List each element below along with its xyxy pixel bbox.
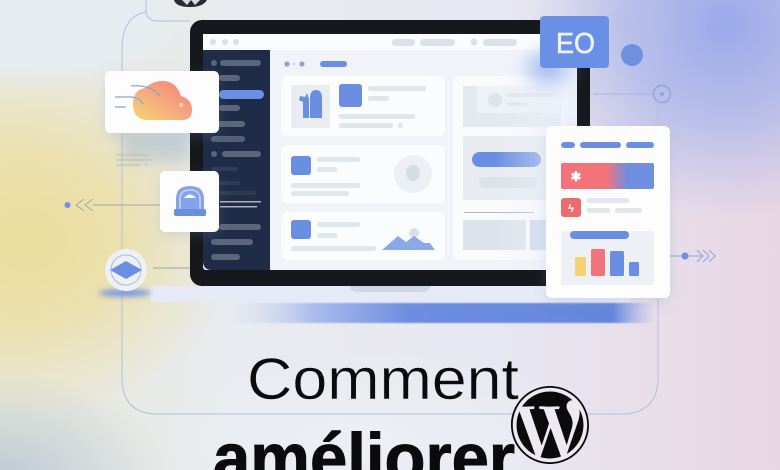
content header: [284, 61, 347, 67]
glow behind EO badge: [528, 54, 568, 82]
laptop bezel: [190, 20, 590, 286]
red icon row: [561, 198, 642, 217]
gradient banner: ✱: [571, 169, 582, 184]
panel: cloud card: [105, 71, 219, 133]
left arrow connector: [64, 199, 160, 211]
right panel: [453, 76, 568, 260]
gradient banner: [561, 163, 654, 189]
card: middle: [281, 145, 445, 203]
red icon row: ϟ: [568, 203, 574, 215]
sidebar: [203, 50, 270, 270]
top WordPress logo fragment: [174, 0, 207, 7]
panel: lock card: [160, 171, 219, 232]
left small text lines: [116, 155, 153, 165]
shadow under cloud card: [122, 130, 192, 162]
laptop base: [150, 286, 630, 302]
connector with target node: [593, 86, 670, 102]
card: bottom: [281, 212, 445, 260]
icon: round layers badge: [99, 249, 190, 296]
laptop shadow: [230, 303, 655, 323]
background frame lines: [122, 0, 658, 414]
icon: blue dot: [621, 44, 643, 66]
panel: analytics card: [546, 126, 670, 298]
icon: cloud: [115, 81, 192, 120]
icon: lock: [174, 186, 206, 216]
card: top: [281, 76, 445, 136]
laptop notch: [350, 286, 430, 292]
screen fog overlay: [495, 50, 577, 270]
right arrow connector: [670, 250, 715, 262]
browser top bar: [203, 34, 577, 50]
browser window: [203, 34, 577, 270]
bar chart: [561, 231, 654, 285]
title: Comment: [247, 347, 519, 412]
EO badge: EO: [556, 28, 595, 60]
EO badge: [540, 16, 609, 68]
laptop: [150, 20, 630, 302]
title: [213, 347, 519, 470]
icon: WordPress logo: [511, 386, 589, 464]
